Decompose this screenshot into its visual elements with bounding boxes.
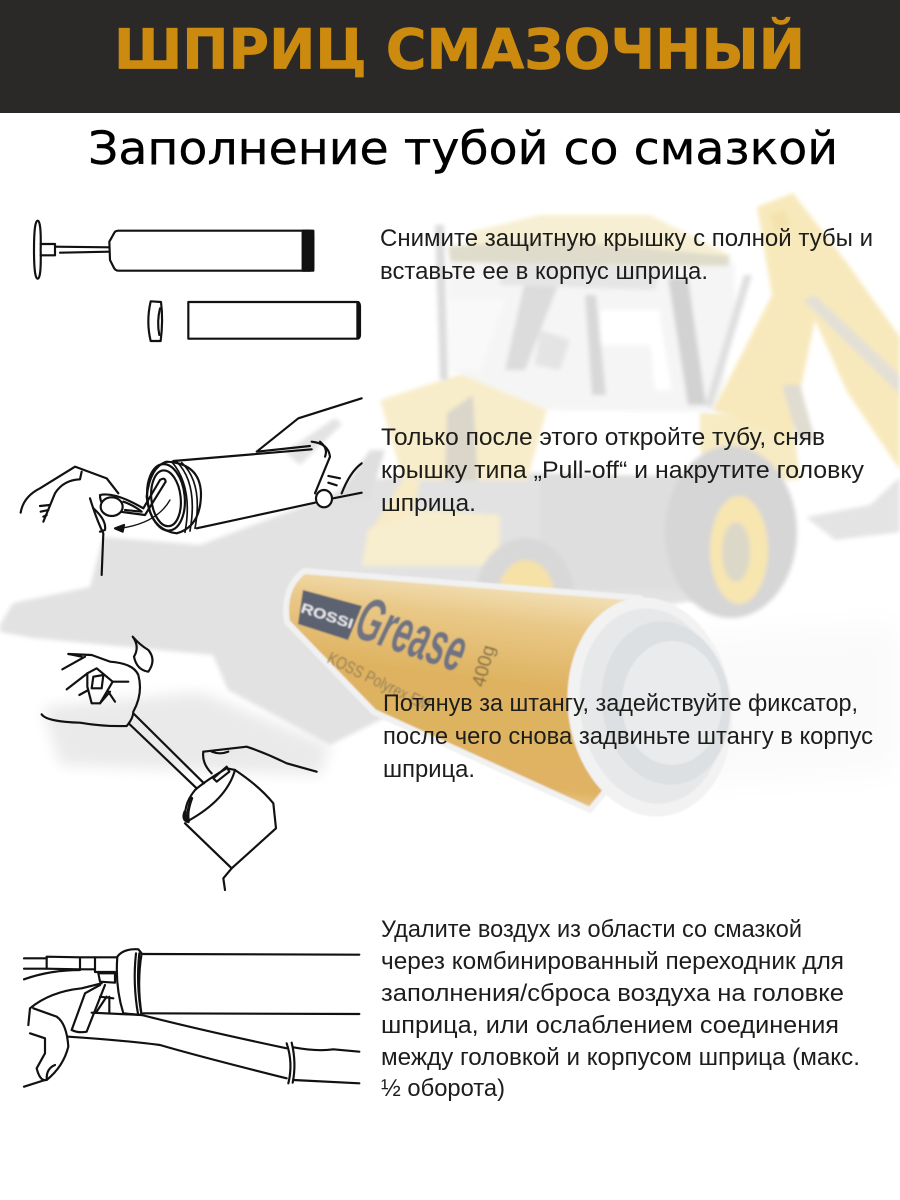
- header band: [0, 0, 900, 113]
- grease tube: [188, 302, 360, 339]
- text block 1: [380, 225, 873, 285]
- tube label text: KOSS Polyrex EM: [324, 649, 433, 715]
- illustration: pulling rod and locking: [42, 637, 317, 890]
- front wheel: [475, 538, 575, 662]
- subtitle: Заполнение тубой со смазкой: [88, 122, 838, 175]
- text block 1: вставьте ее в корпус шприца.: [380, 258, 708, 285]
- text block 2: [381, 424, 864, 517]
- arrow: [120, 500, 170, 528]
- front bucket silhouette: [0, 470, 700, 745]
- illustration: syringe and tube parts: [34, 221, 360, 341]
- backhoe boom: [713, 193, 900, 470]
- title: ШПРИЦ СМАЗОЧНЫЙ: [114, 16, 805, 82]
- text block 3: Потянув за штангу, задействуйте фиксатор,: [383, 690, 858, 717]
- ground shadow: [43, 625, 900, 785]
- loader arm stripes: [285, 418, 342, 465]
- rear wheel: [665, 446, 797, 618]
- text block 4: ½ оборота): [381, 1075, 505, 1102]
- text block 3: после чего снова задвиньте штангу в корпус: [383, 723, 873, 750]
- tube label text: Grease: [347, 584, 476, 686]
- hand holding handle: [42, 654, 140, 726]
- text block 2: Только после этого откройте тубу, сняв: [381, 424, 825, 451]
- pull ring: [100, 479, 166, 515]
- text block 2: крышку типа „Pull-off“ и накрутите головку: [381, 457, 864, 484]
- tube cap: [148, 301, 162, 341]
- illustration: removing pull-off cap: [21, 398, 362, 575]
- text block 4: шприца, или ослаблением соединения: [381, 1012, 839, 1039]
- text block 4: Удалите воздух из области со смазкой: [381, 916, 802, 943]
- syringe body: [109, 231, 313, 271]
- background: faded backhoe loader photo: [0, 193, 900, 785]
- engine hood and body: [362, 367, 800, 590]
- forearm: [68, 1037, 287, 1078]
- tube cap: [553, 587, 747, 827]
- text block 3: [383, 690, 873, 783]
- text block 2: шприца.: [381, 490, 476, 517]
- head and hose: [24, 957, 117, 969]
- text block 3: шприца.: [383, 756, 475, 783]
- text block 4: заполнения/сброса воздуха на головке: [381, 980, 844, 1007]
- upper right hand: [257, 398, 362, 452]
- plunger handle: [34, 221, 41, 279]
- lower hand and syringe body: [203, 747, 317, 772]
- cab roof: [448, 215, 730, 290]
- tube label text: 400g: [469, 643, 500, 689]
- illustration: bleeding air from grease gun: [24, 949, 359, 1087]
- text block 4: через комбинированный переходник для: [381, 948, 844, 975]
- rear bucket: [806, 477, 900, 540]
- tube label text: ROSSI: [299, 600, 355, 632]
- text block 1: Снимите защитную крышку с полной тубы и: [380, 225, 873, 252]
- rod: [129, 714, 204, 788]
- tube label text: [298, 584, 500, 715]
- cab: [435, 225, 752, 412]
- left hand: [21, 467, 118, 513]
- tube with thread: [173, 449, 315, 528]
- text block 4: между головкой и корпусом шприца (макс.: [381, 1044, 860, 1071]
- grease tube photo: [286, 571, 747, 827]
- gun body: [143, 954, 359, 1014]
- text block 4: [381, 916, 860, 1102]
- hand with lever: [28, 983, 102, 1080]
